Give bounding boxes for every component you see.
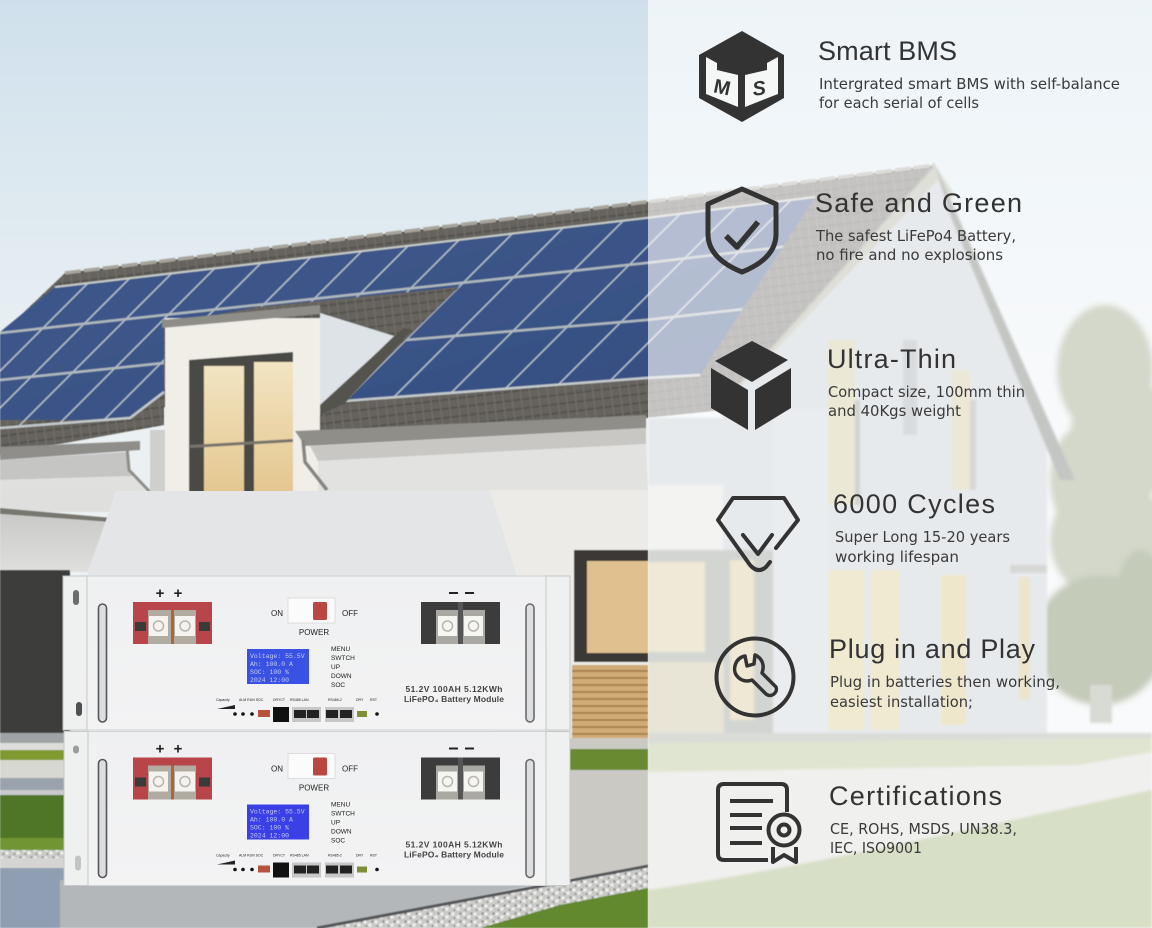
description: working lifespan <box>835 548 959 566</box>
garage ceiling <box>0 514 106 572</box>
gravel bed <box>317 866 648 928</box>
wall beside dormer <box>150 430 165 492</box>
upper windows <box>828 340 855 505</box>
menu labels: SOC <box>331 682 345 689</box>
LCD screen: 2024 12:00 <box>250 832 289 840</box>
porch wall lower <box>648 485 723 550</box>
ground window frame <box>574 550 648 662</box>
power switch: OFF <box>342 764 358 774</box>
dormer cap <box>162 305 320 328</box>
handles <box>98 604 106 722</box>
ear holes <box>73 746 79 754</box>
model label: LiFePO₄ Battery Module <box>404 694 504 704</box>
description <box>835 528 1010 566</box>
dormer window <box>189 352 293 492</box>
battery top lid <box>87 491 517 576</box>
negative terminal <box>421 592 500 644</box>
LCD screen: SOC: 100 % <box>250 824 289 832</box>
menu labels: UP <box>331 820 340 826</box>
positive terminal: + <box>156 585 165 602</box>
description: Compact size, 100mm thin <box>828 383 1025 401</box>
LCD screen <box>247 804 309 840</box>
heading: Ultra-Thin <box>827 344 956 374</box>
menu labels: UP <box>331 664 340 671</box>
icon: BMS cube <box>699 31 784 122</box>
handles <box>98 760 106 878</box>
model label <box>404 840 504 860</box>
icon: shield check <box>708 189 776 272</box>
description: Plug in batteries then working, <box>830 673 1060 691</box>
grass strip faded <box>648 738 1152 772</box>
power switch: ON <box>271 609 283 618</box>
LCD screen: Voltage: 55.5V <box>250 653 305 660</box>
description: Super Long 15-20 years <box>835 528 1010 546</box>
heading: Safe and Green <box>815 188 1022 218</box>
port row: DRYCT <box>273 854 286 858</box>
LCD screen <box>247 649 309 684</box>
positive terminal <box>133 740 212 800</box>
heading: Certifications <box>829 781 1002 811</box>
feature: 6000 Cycles <box>718 489 1010 570</box>
LCD screen: Voltage: 55.5V <box>250 808 305 816</box>
port row: DRY <box>356 854 364 858</box>
upper rail of panels <box>55 197 815 287</box>
grass strip <box>568 749 648 770</box>
model label <box>404 684 504 704</box>
description <box>830 820 1017 857</box>
menu labels: SOC <box>331 838 345 844</box>
dormer front wall <box>165 318 320 493</box>
power switch: POWER <box>299 628 329 637</box>
right wall <box>318 444 648 492</box>
power switch <box>271 754 358 792</box>
wall to right of battery <box>490 490 648 740</box>
ridge highlights <box>65 165 935 273</box>
garage door <box>0 570 70 734</box>
dormer valley shade <box>320 328 412 415</box>
right downpipe <box>303 440 327 490</box>
menu labels: DOWN <box>331 828 352 836</box>
ground left <box>0 733 70 928</box>
port row: ALM RUN SOC <box>239 698 264 702</box>
feature: Plug in and Play <box>716 634 1060 716</box>
garage lintel shadow <box>0 508 112 522</box>
port row <box>216 698 379 722</box>
curb <box>317 866 648 928</box>
feature: Safe and Green <box>708 188 1022 272</box>
heading: Smart BMS <box>818 36 957 66</box>
description: Intergrated smart BMS with self-balance <box>819 75 1120 93</box>
menu labels: SWTCH <box>331 810 355 818</box>
right fascia <box>310 428 646 461</box>
port row: RS485-2 <box>328 698 342 702</box>
house photo: roof and solar panels <box>0 163 936 456</box>
solar panel array <box>0 198 814 426</box>
dormer roof <box>320 287 459 408</box>
lower rail of panels <box>0 375 700 428</box>
description <box>819 75 1120 112</box>
dormer side wall <box>320 313 394 408</box>
description: CE, ROHS, MSDS, UN38.3, <box>830 820 1017 838</box>
house photo: right faded structure <box>648 165 1152 928</box>
menu labels: SWTCH <box>331 655 355 662</box>
LCD screen: SOC: 100 % <box>250 669 289 676</box>
LCD screen: Ah: 100.0 A <box>250 816 293 824</box>
power switch: OFF <box>342 609 358 618</box>
battery module 2 <box>64 732 570 886</box>
power switch: ON <box>271 764 283 774</box>
ground window glass <box>587 561 648 653</box>
port row: RS485 LAN <box>290 854 309 858</box>
heading: Plug in and Play <box>829 634 1036 664</box>
road under battery <box>60 880 560 928</box>
model label: 51.2V 100AH 5.12KWh <box>406 684 502 694</box>
roof tiles <box>0 165 935 455</box>
ear holes <box>73 590 79 605</box>
icon: wrench in circle <box>716 638 794 716</box>
faded brick base <box>648 662 724 734</box>
tree <box>1035 305 1152 705</box>
power switch <box>271 598 358 637</box>
positive terminal: + <box>174 740 183 758</box>
lawn bottom <box>480 888 648 928</box>
port row: DRYCT <box>273 698 286 702</box>
description: IEC, ISO9001 <box>830 839 922 857</box>
port row: Capacity <box>216 854 230 858</box>
port row: ALM RUN SOC <box>239 854 264 858</box>
porch wall upper <box>648 418 723 485</box>
driveway <box>540 738 648 878</box>
icon: certificate <box>718 784 800 862</box>
menu labels: MENU <box>331 646 350 653</box>
wood cladding <box>572 665 648 738</box>
description <box>830 673 1060 711</box>
port row: RST <box>370 854 378 858</box>
right roof edge <box>935 165 1075 480</box>
left downpipe <box>127 447 150 492</box>
ground <box>648 753 1152 890</box>
LCD screen: 2024 12:00 <box>250 677 289 684</box>
description: no fire and no explosions <box>816 246 1003 264</box>
feature: Smart BMS <box>699 31 1120 122</box>
port row: DRY <box>356 698 364 702</box>
port row: RST <box>370 698 378 702</box>
port row: RS485-2 <box>328 854 342 858</box>
right gutter <box>295 415 646 446</box>
overlay: translucent white right panel <box>648 0 1152 928</box>
description: and 40Kgs weight <box>828 402 961 420</box>
menu labels: DOWN <box>331 673 352 680</box>
description: for each serial of cells <box>819 94 979 112</box>
heading: 6000 Cycles <box>833 489 995 519</box>
positive terminal <box>133 585 212 644</box>
icon: diamond <box>718 498 798 570</box>
front plate <box>64 732 570 886</box>
positive terminal: + <box>174 585 183 602</box>
port row <box>216 854 379 878</box>
left eave <box>0 441 140 460</box>
pillar <box>773 410 828 733</box>
menu labels <box>331 646 355 689</box>
negative terminal <box>421 748 500 800</box>
house photo: left structure <box>0 287 648 928</box>
lower storey band left <box>648 550 773 733</box>
icon: BMS cube: S <box>751 77 768 101</box>
lawn <box>648 790 1152 928</box>
lower windows <box>648 562 705 652</box>
feature: Ultra-Thin <box>711 341 1025 430</box>
menu labels: MENU <box>331 802 350 808</box>
description: easiest installation; <box>830 693 973 711</box>
icon: BMS cube: M <box>712 76 732 100</box>
LCD screen: Ah: 100.0 A <box>250 661 293 668</box>
positive terminal: + <box>156 740 165 758</box>
menu labels <box>331 802 355 844</box>
feature: Certifications <box>718 781 1017 862</box>
model label: 51.2V 100AH 5.12KWh <box>406 840 502 850</box>
description: The safest LiFePo4 Battery, <box>815 227 1016 245</box>
description <box>828 383 1025 420</box>
wall above garage <box>0 490 125 512</box>
battery stack <box>63 491 570 886</box>
model label: LiFePO₄ Battery Module <box>404 850 504 860</box>
battery module 1 <box>63 576 570 730</box>
gable fascia <box>723 165 955 402</box>
icon: box <box>711 341 791 430</box>
front plate <box>63 576 570 730</box>
description <box>815 227 1016 264</box>
gable wall <box>723 180 1047 735</box>
port row: Capacity <box>216 698 230 702</box>
shed <box>1090 685 1112 723</box>
port row: RS485 LAN <box>290 698 309 702</box>
power switch: POWER <box>299 784 329 792</box>
